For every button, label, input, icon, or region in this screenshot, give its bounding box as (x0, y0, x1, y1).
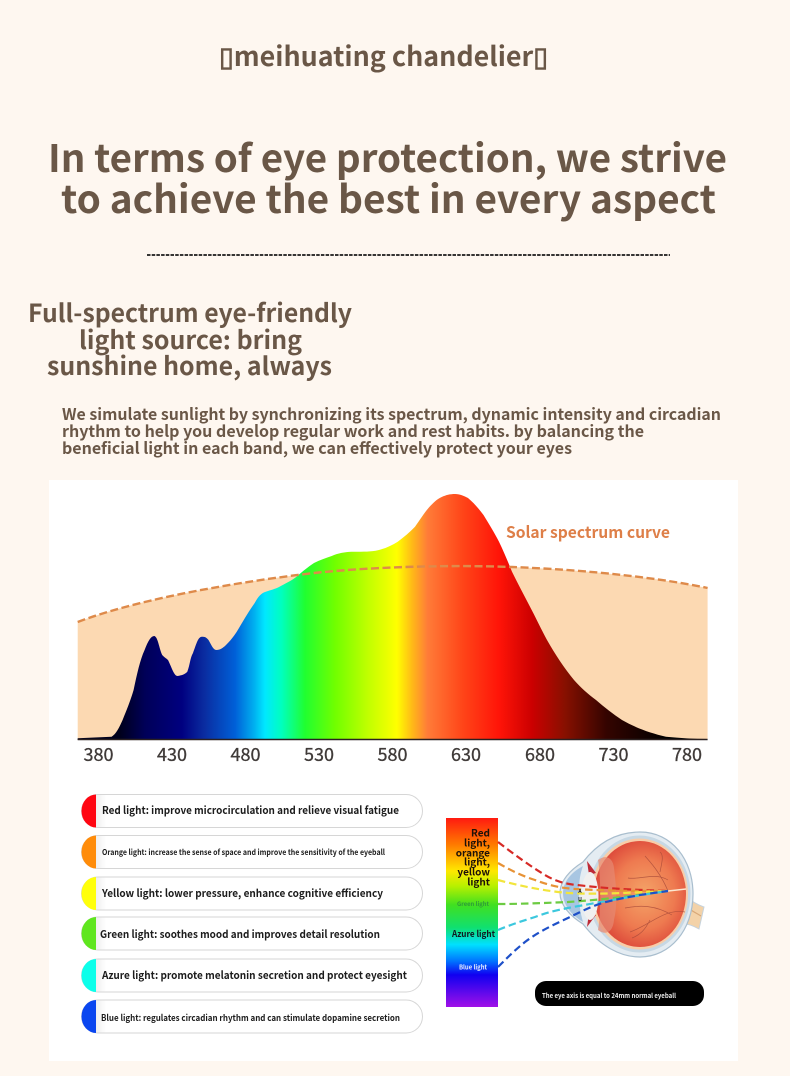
description paragraph (62, 401, 721, 459)
description paragraph: rhythm to help you develop regular work and rest habits. by balancing the (62, 418, 644, 442)
main heading: In terms of eye protection, we strive (48, 128, 727, 183)
wavelength axis labels: 680 (525, 741, 555, 767)
wavelength axis labels: 530 (304, 741, 334, 767)
icon: rainbow spectrum bar with labels: light, (464, 834, 490, 850)
item: yellow light: Yellow light: lower pressure, enhance cognitive efficiency (101, 885, 384, 901)
wavelength axis labels: 480 (231, 741, 260, 767)
subheading: light source: bring (79, 321, 302, 357)
main heading: to achieve the best in every aspect (61, 169, 716, 224)
item: azure light: Azure light: promote melatonin secretion and protect eyesight (101, 967, 407, 983)
wavelength axis labels (84, 741, 702, 767)
item: blue light (82, 1000, 422, 1033)
wavelength axis labels: 380 (84, 741, 113, 767)
lens (582, 872, 598, 920)
lens markers: A (577, 888, 582, 895)
sclera (560, 832, 693, 957)
subheading: sunshine home, always (47, 347, 332, 383)
icon: rainbow spectrum bar with labels: yellow (457, 864, 490, 878)
item: green light: Green light: soothes mood and improves detail resolution (100, 926, 380, 942)
icon: rainbow spectrum bar with labels: light, (464, 854, 490, 868)
lens markers: U (578, 896, 582, 903)
wavelength axis labels: 780 (672, 741, 702, 767)
icon: rainbow spectrum bar with labels: Green light (457, 899, 489, 908)
dashed divider (147, 254, 670, 256)
list: light benefits (82, 794, 422, 1033)
lens markers (577, 888, 582, 903)
subheading (28, 294, 353, 383)
baseline (78, 738, 708, 740)
subheading: Full-spectrum eye-friendly (28, 294, 353, 330)
icon: rainbow spectrum bar with labels: Azure light (451, 927, 495, 940)
anterior chamber (563, 866, 583, 922)
item: orange light (82, 836, 422, 868)
main heading (48, 128, 727, 224)
item: red light: Red light: improve microcirculation and relieve visual fatigue (102, 802, 399, 818)
item: red light (82, 794, 422, 828)
icon: eyeball cross-section (560, 832, 704, 957)
pale optic line (668, 889, 686, 891)
icon: rainbow spectrum bar with labels: light (467, 874, 491, 888)
icon: rainbow spectrum bar with labels: Blue light (459, 962, 487, 972)
panel: white content card (49, 480, 738, 1061)
item: green light (82, 917, 422, 950)
wavelength axis labels: 430 (157, 741, 187, 767)
item: blue light: Blue light: regulates circadian rhythm and can stimulate dopamine secretion (101, 1011, 400, 1024)
ciliary tissue (598, 857, 616, 933)
iris (587, 861, 596, 927)
wavelength axis labels: 630 (451, 741, 481, 767)
arrows: dashed light rays into the eye (498, 842, 668, 967)
item: orange light: Orange light: increase the sense of space and improve the sensitivity of the eyeball (102, 847, 385, 858)
callout: eye axis note: The eye axis is equal to 24mm normal eyeball (542, 990, 676, 1000)
full-spectrum light curve (78, 494, 708, 740)
brand title: ▯meihuating chandelier▯ (219, 35, 548, 74)
retinal vessels (625, 852, 685, 938)
description paragraph: We simulate sunlight by synchronizing its spectrum, dynamic intensity and circadian (62, 401, 721, 425)
optic nerve (680, 895, 704, 929)
retina (594, 841, 686, 947)
item: azure light (82, 959, 422, 992)
solar spectrum area (78, 566, 708, 739)
solar spectrum curve label: Solar spectrum curve (506, 519, 670, 543)
item: yellow light (82, 877, 422, 910)
description paragraph: beneficial light in each band, we can effectively protect your eyes (62, 435, 572, 459)
icon: rainbow spectrum bar with labels: orange (456, 844, 490, 860)
icon: rainbow spectrum bar with labels (446, 818, 498, 1007)
wavelength axis labels: 580 (378, 741, 407, 767)
nerve stripes (688, 908, 701, 916)
chart: solar and full-spectrum curves (78, 494, 708, 767)
sclera blue band (588, 836, 690, 952)
solar dashed curve (78, 566, 708, 622)
choroid (591, 838, 688, 950)
callout: eye axis note (535, 981, 704, 1006)
icon: rainbow spectrum bar with labels: Red (471, 824, 490, 840)
wavelength axis labels: 730 (599, 741, 628, 767)
